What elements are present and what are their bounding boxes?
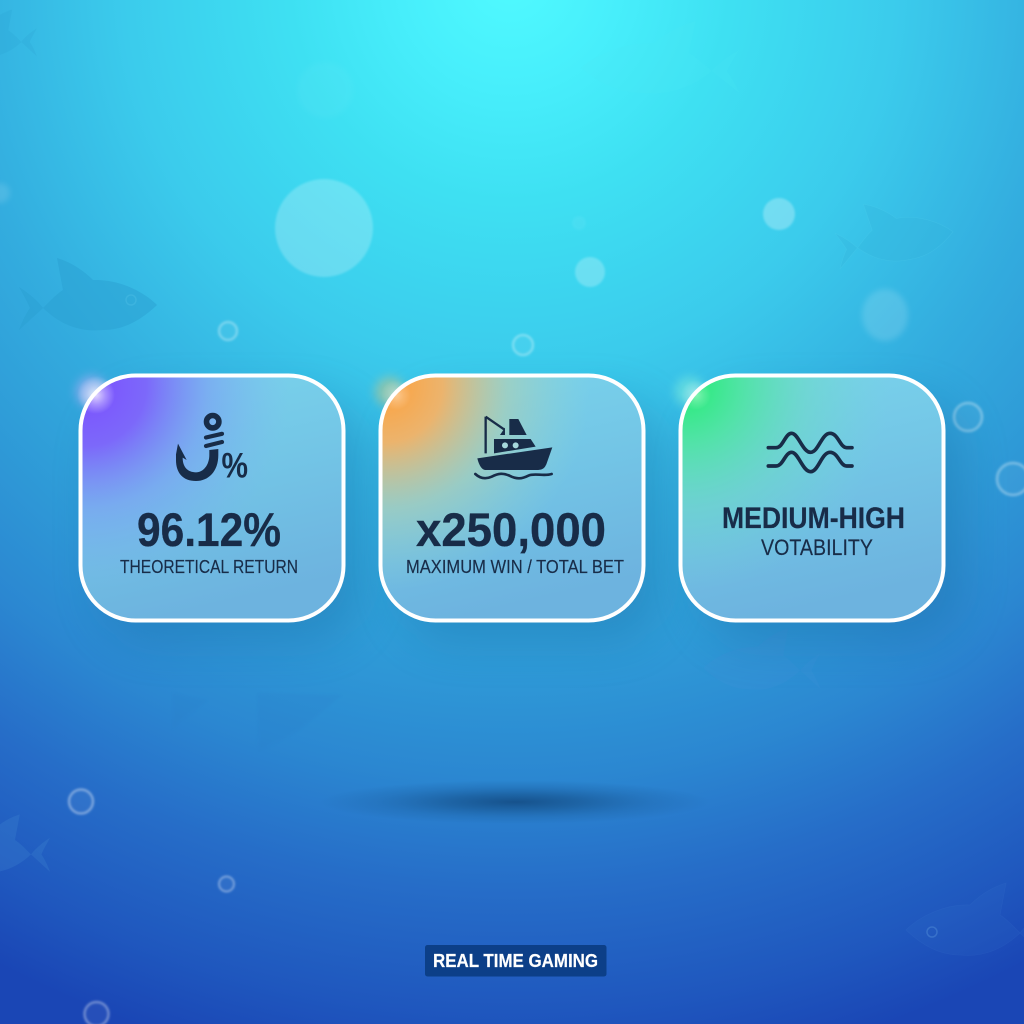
label: THEORETICAL RETURN (120, 556, 298, 577)
fish: top left tail (0, 9, 37, 57)
icon: fishing boat (475, 417, 552, 478)
fish: below right card (703, 628, 821, 690)
fish: top faint (581, 21, 739, 93)
percent sign: % (222, 446, 248, 486)
label: MAXIMUM WIN / TOTAL BET (406, 556, 624, 577)
icon: waves (768, 433, 852, 472)
value: x250,000 (416, 503, 606, 556)
label: VOTABILITY (761, 535, 873, 560)
icon: fishing hook with percent (176, 416, 248, 486)
brand badge: REAL TIME GAMING (433, 950, 598, 971)
value: 96.12% (137, 503, 281, 556)
fish: far left tail (0, 814, 50, 872)
value: MEDIUM-HIGH (722, 502, 905, 535)
card 2: maximum win (375, 376, 662, 640)
fish: left dark (19, 258, 157, 330)
fish: right faint (831, 192, 956, 270)
fish: bottom right (906, 883, 1024, 955)
floor shadow (320, 780, 710, 824)
fish: lower left fins (172, 693, 342, 753)
brand badge (425, 945, 606, 976)
card 3: volatility (675, 376, 962, 640)
card 1: theoretical return (76, 376, 362, 640)
